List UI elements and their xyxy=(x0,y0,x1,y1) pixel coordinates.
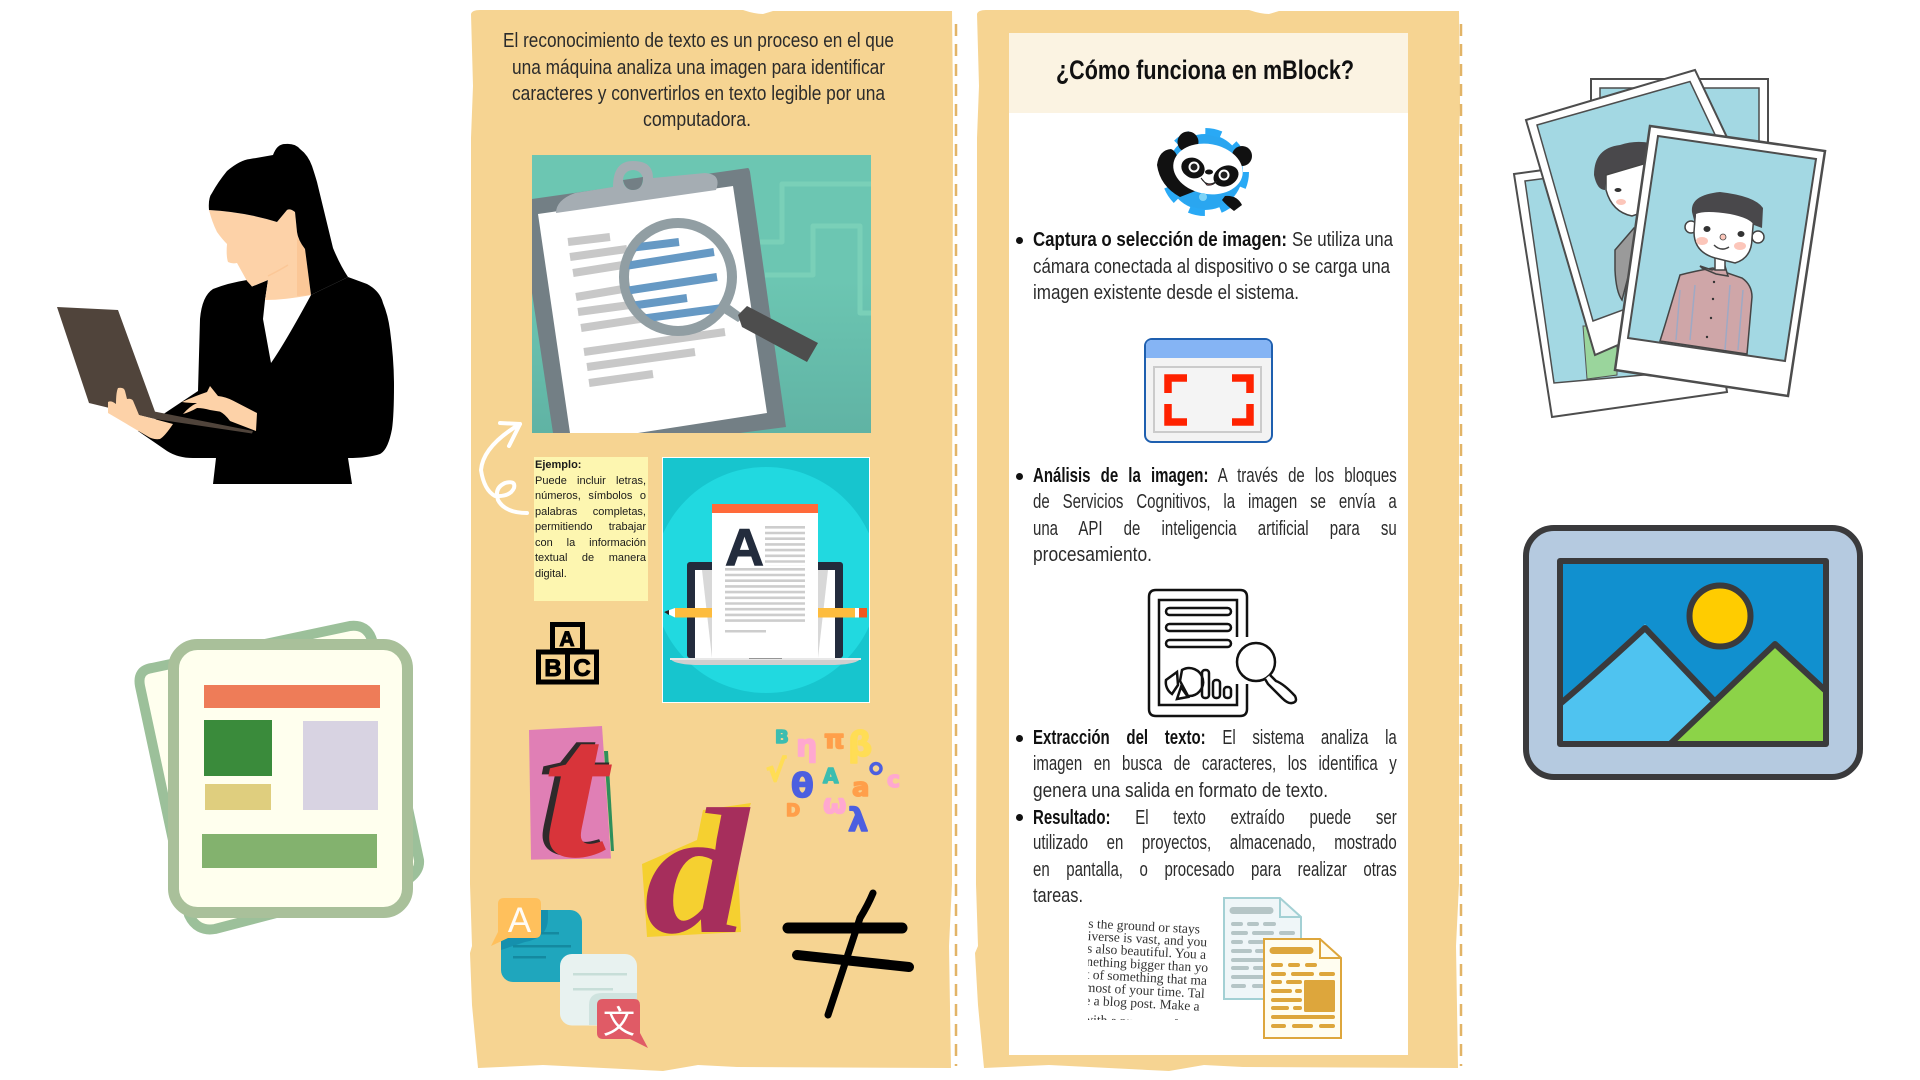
icon: document analysis with magnifier xyxy=(1149,590,1296,716)
letter cutout: t: t xyxy=(543,682,612,898)
text: example note: permitiendo trabajar xyxy=(535,521,646,533)
text: capture step: imagen existente desde el sistema. xyxy=(1033,282,1299,304)
text: introduction paragraph xyxy=(503,30,894,131)
decoration: colourful math symbols: √ xyxy=(766,754,787,789)
decoration: colourful math symbols: B xyxy=(775,727,789,748)
text: extraction step: imagen en busca de caracteres, los identifica y xyxy=(1033,753,1397,775)
text: introduction paragraph: una máquina analiza una imagen para identificar xyxy=(512,57,885,79)
text: extraction step: Extracción del texto: El sistema analiza la xyxy=(1033,727,1397,749)
image: clipboard and magnifier xyxy=(532,155,871,433)
text: analysis step: de Servicios Cognitivos, la imagen se envía a xyxy=(1033,491,1397,513)
white content card xyxy=(1009,33,1408,1055)
logo: mBlock panda xyxy=(1157,132,1252,211)
text: analysis step: una API de inteligencia artificial para su xyxy=(1033,518,1397,540)
text: analysis step: Análisis de la imagen: A través de los bloques xyxy=(1033,465,1397,487)
letter cutout: t: t xyxy=(536,680,609,896)
image: rotated serif text fragment: with a purpose of xyxy=(1083,1012,1178,1032)
image: rotated serif text fragment: iverse is vast, and you xyxy=(1087,928,1208,949)
text: introduction paragraph: El reconocimiento de texto es un proceso en el que xyxy=(503,30,894,52)
icon: stacked documents xyxy=(1224,898,1341,1038)
icon: screen capture window xyxy=(1145,339,1272,442)
icon: translation bubbles xyxy=(491,898,648,1048)
image: rotated serif text fragment xyxy=(1088,920,1208,1020)
icon: translation bubbles: 文 xyxy=(603,997,635,1043)
letter cutout: d: d xyxy=(644,772,751,971)
text: capture step: Se utiliza una xyxy=(1292,229,1394,251)
illustration: stacked polaroid photos xyxy=(1514,70,1825,417)
icon: ABC blocks: C xyxy=(573,655,591,682)
text: introduction paragraph: computadora. xyxy=(643,109,751,131)
icon: not equal sign xyxy=(788,893,909,1015)
decoration: colourful math symbols: η xyxy=(796,729,817,764)
decoration: colourful math symbols: c xyxy=(887,768,900,793)
text: capture step: Captura o selección de imagen: xyxy=(1033,229,1287,251)
image: rotated serif text fragment: e a blog post. Make a xyxy=(1084,993,1200,1014)
text: example note: textual de manera xyxy=(535,552,646,564)
arrow: curly white xyxy=(481,423,527,513)
decoration: colourful math symbols: D xyxy=(786,801,800,821)
text: example note: números, símbolos o xyxy=(535,490,646,502)
image: rotated serif text fragment: most of your time. Tal xyxy=(1085,980,1205,1001)
panel: left torn paper xyxy=(470,10,953,1071)
card header band xyxy=(1009,33,1408,113)
image: document on laptop: A xyxy=(725,519,764,577)
icon: ABC blocks xyxy=(538,624,596,682)
note: yellow background xyxy=(534,457,648,601)
letter cutout: t xyxy=(529,680,614,898)
illustration: stacked green documents xyxy=(140,626,419,929)
text: example note: Ejemplo: xyxy=(535,459,581,471)
text: example note: digital. xyxy=(535,568,567,580)
panel: right torn paper xyxy=(975,10,1460,1071)
decoration: colourful math symbols: π xyxy=(824,725,845,755)
icon: ABC blocks: B xyxy=(544,655,562,682)
illustration: woman with laptop xyxy=(57,144,394,484)
decoration: colourful math symbols: β xyxy=(848,725,872,765)
text: example note: Puede incluir letras, xyxy=(535,474,646,486)
icon: translation bubbles: A xyxy=(508,901,532,940)
decoration: colourful math symbols: A xyxy=(823,764,839,788)
decoration: colourful math symbols: λ xyxy=(848,801,868,839)
text: result step: utilizado en proyectos, almacenado, mostrado xyxy=(1033,832,1397,854)
text: result step: Resultado: El texto extraído puede ser xyxy=(1033,806,1397,828)
image: rotated serif text fragment: s also beautiful. You a xyxy=(1087,941,1207,962)
text: result step: en pantalla, o procesado para realizar otras xyxy=(1033,859,1397,881)
image: rotated serif text fragment: t of something that ma xyxy=(1085,967,1207,988)
image: rotated serif text fragment: nething bigger than yo xyxy=(1086,954,1209,975)
text: capture step: cámara conectada al dispositivo o se carga una xyxy=(1033,256,1391,278)
text: result step: tareas. xyxy=(1033,885,1083,907)
text: extraction step: genera una salida en formato de texto. xyxy=(1033,780,1328,802)
heading: como funciona: ¿Cómo funciona en mBlock? xyxy=(1056,55,1354,85)
dashed border: right panel xyxy=(1460,24,1462,1066)
decoration: colourful math symbols: θ xyxy=(791,766,814,805)
text: analysis step: procesamiento. xyxy=(1033,544,1152,566)
icon: ABC blocks: A xyxy=(559,628,575,651)
dashed border: left panel xyxy=(955,24,957,1066)
image: rotated serif text fragment: s the ground or stays xyxy=(1088,916,1200,937)
decoration: colourful math symbols: ω xyxy=(823,789,846,820)
text: example note: palabras completas, xyxy=(535,506,646,518)
image: document on laptop xyxy=(653,457,879,703)
text: introduction paragraph: caracteres y convertirlos en texto legible por una xyxy=(512,83,886,105)
icon: landscape image xyxy=(1526,528,1860,777)
text: example note: con la información xyxy=(535,536,646,548)
decoration: colourful math symbols: a xyxy=(852,773,870,803)
decoration: colourful math symbols xyxy=(766,725,900,839)
